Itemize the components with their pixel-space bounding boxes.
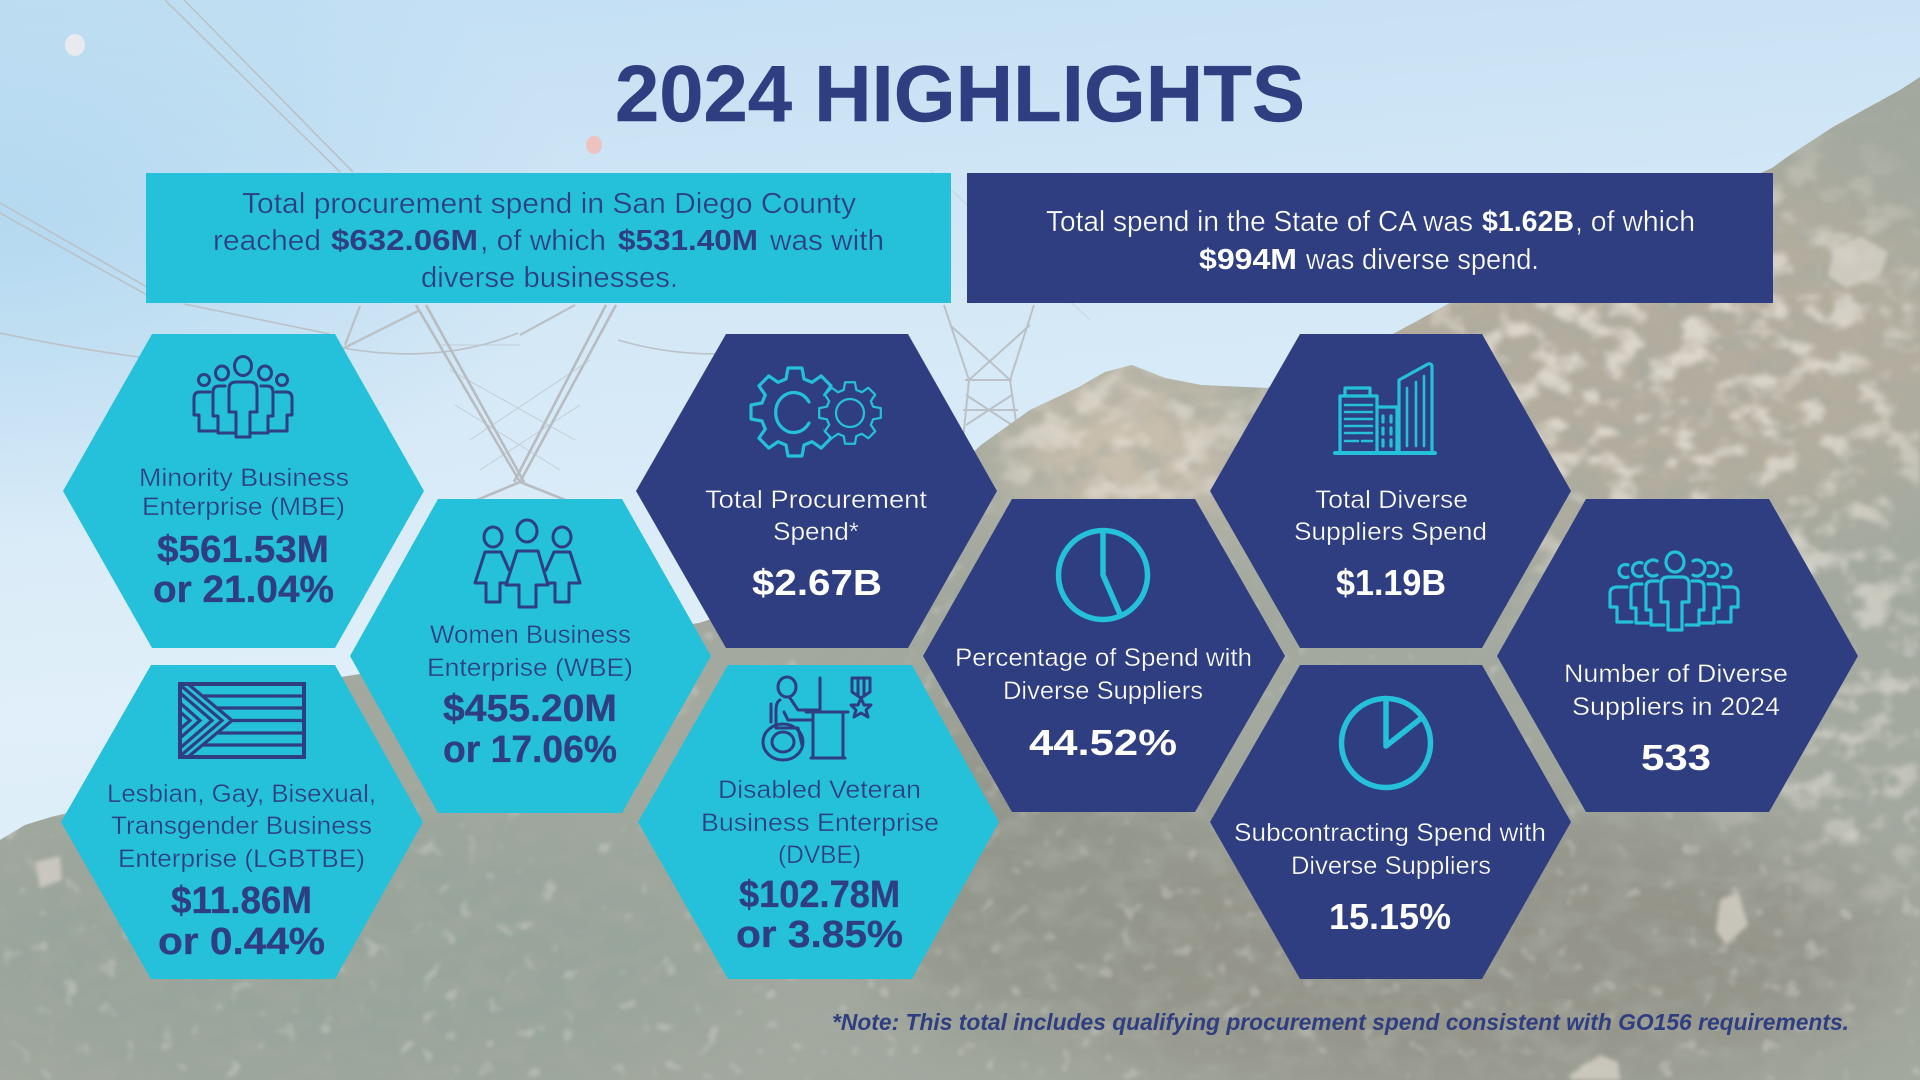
value: or 3.85% xyxy=(736,914,903,956)
callout: San Diego County spend: reached xyxy=(213,225,321,257)
value: $561.53M xyxy=(157,529,329,571)
label: Business Enterprise xyxy=(701,809,939,837)
icon: city buildings xyxy=(1335,364,1435,453)
icon: two gears xyxy=(751,368,881,456)
label xyxy=(955,644,1252,705)
icon: veteran in wheelchair at desk with medal xyxy=(763,677,871,760)
label: (DVBE) xyxy=(778,841,861,869)
label: Percentage of Spend with xyxy=(955,644,1252,672)
label: Disabled Veteran xyxy=(718,776,921,804)
label: Subcontracting Spend with xyxy=(1234,819,1546,847)
label xyxy=(139,464,349,521)
callout: San Diego County spend: $531.40M xyxy=(618,225,758,257)
label: Women Business xyxy=(430,621,631,649)
label: Number of Diverse xyxy=(1564,660,1788,688)
callout: San Diego County spend: diverse businesses. xyxy=(421,262,678,294)
label: Spend* xyxy=(773,518,859,546)
callout: San Diego County spend: Total procurement spend in San Diego County xyxy=(242,188,857,220)
label xyxy=(1234,819,1546,880)
value xyxy=(443,688,617,771)
callout: San Diego County spend: , of which xyxy=(480,225,606,257)
value: $1.19B xyxy=(1336,562,1446,603)
panel: Women Business Enterprise xyxy=(350,499,711,813)
callout: State of CA spend: , of which xyxy=(1575,206,1695,238)
label xyxy=(705,486,927,546)
label: Enterprise (WBE) xyxy=(427,654,633,682)
value: $11.86M xyxy=(171,880,312,922)
label: Total Diverse xyxy=(1315,486,1468,514)
value xyxy=(158,880,325,963)
panel: Total Diverse Suppliers Spend xyxy=(1210,334,1571,648)
panel: Number of Diverse Suppliers in 2024 xyxy=(1497,499,1858,812)
label: Enterprise (MBE) xyxy=(142,493,345,521)
label: Diverse Suppliers xyxy=(1003,677,1203,705)
label: Transgender Business xyxy=(111,812,372,840)
value: $102.78M xyxy=(739,874,900,916)
panel: Total Procurement Spend xyxy=(636,334,997,648)
icon: pie chart 15.15 percent xyxy=(1342,698,1430,788)
panel: Percentage of Spend with Diverse Suppliers xyxy=(923,499,1285,812)
callout: State of CA spend: was diverse spend. xyxy=(1305,244,1539,276)
label: Diverse Suppliers xyxy=(1291,852,1491,880)
callout: State of CA spend: Total spend in the State of CA was xyxy=(1046,206,1473,238)
callout: State of CA spend: $994M xyxy=(1199,244,1297,276)
callout: San Diego County spend xyxy=(146,173,951,303)
value: or 0.44% xyxy=(158,921,325,963)
label: Minority Business xyxy=(139,464,349,492)
callout: San Diego County spend: $632.06M xyxy=(331,225,478,257)
label: Lesbian, Gay, Bisexual, xyxy=(107,780,376,808)
label: Suppliers in 2024 xyxy=(1572,693,1780,721)
label: Suppliers Spend xyxy=(1294,518,1487,546)
panel: Minority Business Enterprise xyxy=(63,334,424,648)
label xyxy=(1294,486,1487,546)
value: or 17.06% xyxy=(443,729,617,771)
power lines and towers xyxy=(0,0,1090,505)
panel: Disabled Veteran Business Enterprise xyxy=(638,665,999,979)
value: 533 xyxy=(1641,737,1711,778)
callout: State of CA spend xyxy=(967,173,1773,303)
callout: San Diego County spend: was with xyxy=(769,225,884,257)
label xyxy=(107,780,376,873)
value: $2.67B xyxy=(752,562,882,603)
panel: LGBT Business Enterprise xyxy=(61,665,423,979)
footnote: *Note: This total includes qualifying procurement spend consistent with GO156 requirements. xyxy=(832,1009,1849,1035)
value: 15.15% xyxy=(1329,896,1451,937)
callout: State of CA spend: $1.62B xyxy=(1482,206,1574,238)
value: or 21.04% xyxy=(153,569,334,611)
label xyxy=(1564,660,1788,721)
value: 44.52% xyxy=(1029,722,1177,763)
icon: three women xyxy=(475,520,580,607)
value xyxy=(153,529,334,611)
icon: crowd of people xyxy=(1610,552,1738,630)
panel: Subcontracting Spend with Diverse Suppliers xyxy=(1210,665,1571,979)
label: Enterprise (LGBTBE) xyxy=(118,845,365,873)
icon: pride flag xyxy=(179,684,304,757)
label xyxy=(427,621,633,682)
label: Total Procurement xyxy=(705,486,927,514)
balloon markers xyxy=(65,34,85,56)
value xyxy=(736,874,903,956)
label xyxy=(701,776,939,869)
icon: group of five people xyxy=(194,356,292,437)
value: $455.20M xyxy=(443,688,617,730)
title: 2024 HIGHLIGHTS xyxy=(615,49,1305,138)
icon: pie chart 44.52 percent xyxy=(1058,530,1148,620)
